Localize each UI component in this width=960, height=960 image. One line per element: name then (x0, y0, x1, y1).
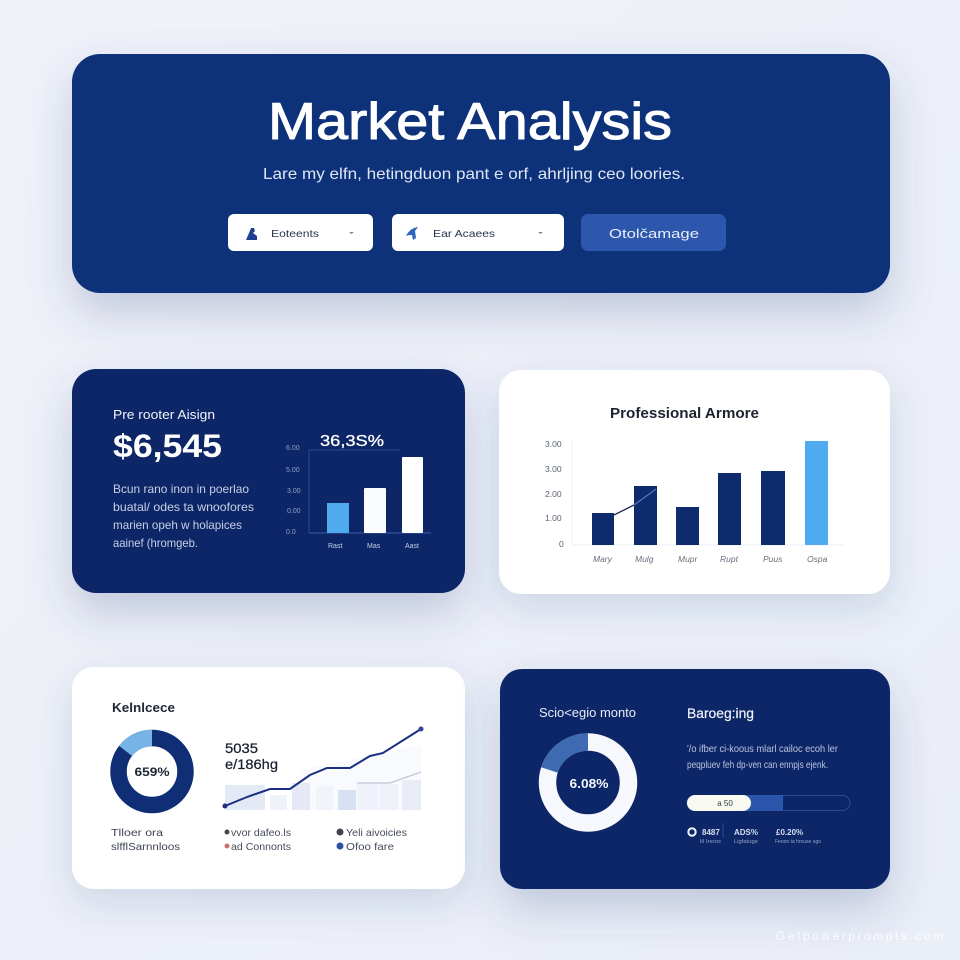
bar chart: 1.00 (545, 513, 562, 523)
button: Otolčamage (609, 227, 699, 241)
stats row: Ligfatuge (734, 839, 758, 845)
line chart (222, 726, 424, 810)
bar chart: Mulg (635, 554, 654, 564)
donut chart (118, 738, 186, 805)
bar chart: 2.00 (545, 489, 562, 499)
description: Bcun rano inon in poerlao (113, 482, 249, 496)
description: peqpluev feh dp-ven can ennpjs ejenk. (687, 759, 828, 771)
bar chart: 3.00 (545, 439, 562, 449)
watermark: Getpowerprompts.com (776, 929, 943, 943)
description: '/o ifber ci-koous mlarl cailoc ecoh ler (687, 743, 838, 755)
dropdown: ear acaees: Ear Acaees (433, 228, 495, 240)
description: marien opeh w holapices (113, 518, 242, 532)
bar chart: Mary (593, 554, 613, 564)
donut chart: 659% (134, 765, 170, 779)
panel: hero header (72, 54, 890, 293)
bar chart: Puus (763, 554, 783, 564)
legend: Yeli aivoicies (346, 827, 407, 839)
card heading: Professional Armore (610, 406, 759, 422)
trend value: 5035 (225, 741, 258, 756)
bar chart (545, 439, 844, 564)
donut caption (111, 827, 180, 853)
dropdown: elements: Eoteents (271, 228, 319, 240)
button (581, 214, 726, 251)
left heading: Scio<egio monto (539, 705, 636, 720)
progress bar: a 50 (717, 799, 733, 808)
progress bar (687, 795, 850, 811)
legend: ad Connonts (231, 841, 291, 853)
bar chart: 6.00 (286, 445, 300, 452)
card heading: Kelnlcece (112, 700, 175, 715)
stats row: Feoon ta hrouse ugo (775, 839, 821, 845)
donut chart: 6.08% (570, 776, 609, 791)
legend (224, 827, 407, 853)
stats row: lil Inoos (700, 839, 722, 845)
legend: Ofoo fare (346, 841, 394, 853)
bar chart: 5.00 (286, 467, 300, 474)
description (113, 482, 254, 550)
bar chart: Aast (405, 543, 419, 550)
dropdown: elements (228, 214, 373, 251)
stats row (688, 823, 821, 845)
bar chart: Rupt (720, 554, 739, 564)
bar chart: 3.00 (545, 464, 562, 474)
donut caption: slfflSarnnloos (111, 841, 180, 853)
stats row: 8487 (702, 828, 720, 837)
title: Market Analysis (268, 93, 672, 151)
right heading: Baroeg:ing (687, 706, 754, 721)
donut chart (548, 742, 628, 823)
bar chart: 0 (559, 539, 564, 549)
bar chart (286, 433, 431, 550)
bar chart: Mupr (678, 554, 699, 564)
bar chart: Rast (328, 543, 342, 550)
description (687, 743, 838, 771)
bar chart: Mas (367, 543, 381, 550)
bar chart: 0.00 (287, 508, 301, 515)
description: buatal/ odes ta wnoofores (113, 500, 254, 514)
stats row: £0.20% (776, 828, 803, 837)
donut caption: Tlloer ora (111, 827, 163, 839)
bar chart: 0.0 (286, 529, 296, 536)
description: aainef (hromgeb. (113, 536, 198, 550)
panel: donut and trend card (72, 667, 465, 889)
subtitle: Lare my elfn, hetingduon pant e orf, ahrljing ceo loories. (263, 166, 685, 183)
card heading: Pre rooter Aisign (113, 407, 215, 422)
big number: $6,545 (113, 428, 222, 464)
legend: vvor dafeo.ls (231, 827, 291, 839)
panel: revenue card (72, 369, 465, 593)
panel: progress card (500, 669, 890, 889)
bar chart: Ospa (807, 554, 828, 564)
dropdown: ear acaees (392, 214, 564, 251)
trend value (225, 741, 278, 772)
trend value: e/186hg (225, 757, 278, 772)
bar chart: 36,3S% (320, 433, 384, 450)
bar chart: 3.00 (287, 488, 301, 495)
stats row: ADS% (734, 828, 758, 837)
panel: professional bar chart card (499, 370, 890, 594)
